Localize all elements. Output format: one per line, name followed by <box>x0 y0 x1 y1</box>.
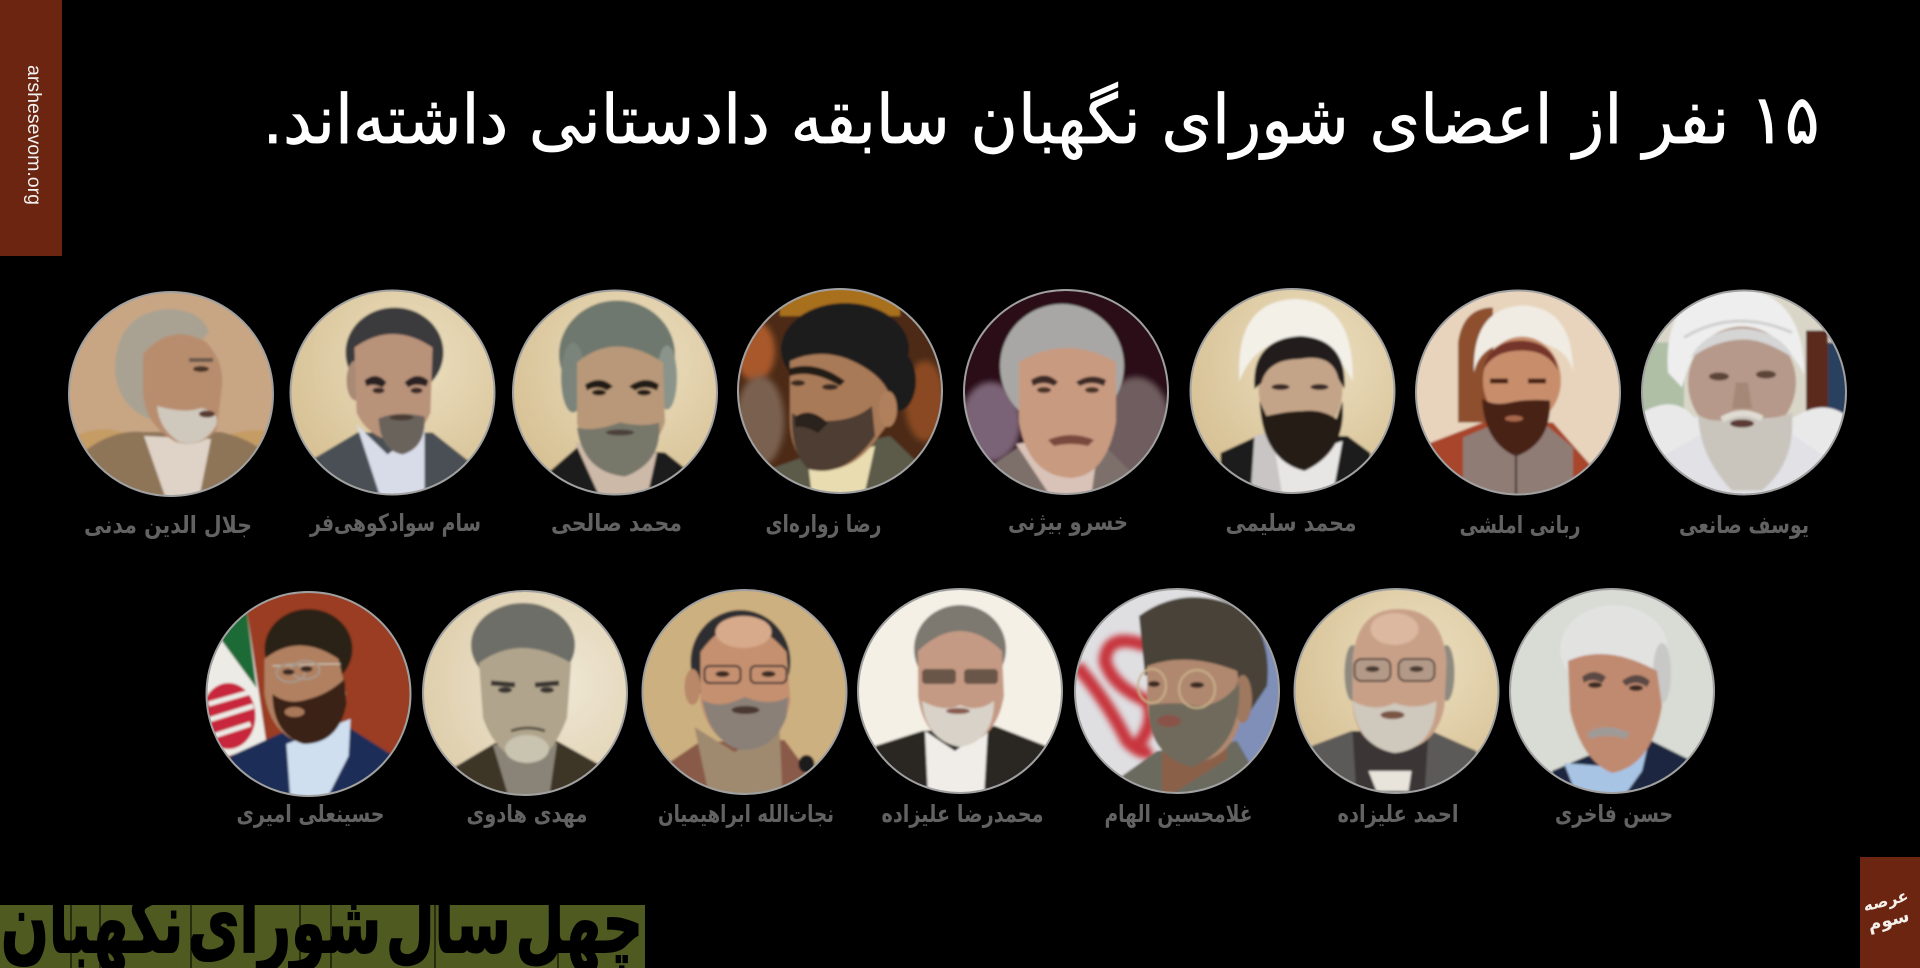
member: Yusef Sanei <box>1639 288 1849 539</box>
portrait <box>510 288 720 498</box>
portrait <box>420 588 630 798</box>
portrait <box>1292 586 1502 796</box>
member: Mohammadreza Alizadeh <box>855 586 1065 828</box>
member: Nejatollah Ebrahimian <box>640 587 850 828</box>
portrait <box>735 286 945 496</box>
side tab: website <box>0 0 62 256</box>
portrait <box>1413 288 1623 498</box>
banner: forty years of the Guardian Council <box>0 905 645 968</box>
name: سام سوادکوهی‌فر <box>309 509 481 537</box>
portrait <box>202 589 414 799</box>
member: Jalaleddin Madani <box>66 289 276 539</box>
name: محمد سلیمی <box>1226 509 1356 537</box>
member: Mehdi Hadavi <box>420 588 630 828</box>
name: خسرو بیژنی <box>1008 508 1128 536</box>
name: محمدرضا علیزاده <box>882 800 1044 828</box>
member: Gholamhossein Elham <box>1072 586 1282 828</box>
name: نجات‌الله ابراهیمیان <box>658 800 834 828</box>
member: Mohammad Salehi <box>510 288 720 537</box>
portrait <box>855 586 1065 796</box>
name: یوسف صانعی <box>1679 511 1809 539</box>
name: حسن فاخری <box>1555 800 1673 828</box>
banner text <box>4 905 638 968</box>
name: ربانی املشی <box>1460 511 1580 539</box>
title: ۱۵ نفر از اعضای شورای نگهبان سابقه دادستانی داشته‌اند. <box>262 81 1819 160</box>
portrait <box>961 287 1171 497</box>
logo calligraphy <box>1861 886 1915 936</box>
member: Rabbani Amlashi <box>1413 288 1623 539</box>
logo calligraphy: عرصه <box>1861 886 1910 915</box>
name: غلامحسین الهام <box>1104 800 1252 828</box>
portrait <box>66 289 276 499</box>
member: Khosrow Bizhani <box>961 287 1171 536</box>
member: Reza Zavarei <box>735 286 945 538</box>
portrait <box>640 587 850 797</box>
name: احمد علیزاده <box>1338 800 1458 828</box>
website address: arshesevom.org <box>23 65 44 205</box>
portrait <box>288 288 498 498</box>
portrait <box>1188 286 1398 496</box>
portrait <box>1072 586 1282 796</box>
member: Mohammad Salimi <box>1188 286 1398 537</box>
member: Hassan Fakhri <box>1507 586 1717 828</box>
name: محمد صالحی <box>551 509 682 537</box>
name: حسینعلی امیری <box>236 800 384 828</box>
name: جلال الدین مدنی <box>84 511 252 539</box>
logo calligraphy: سوم <box>1866 905 1912 936</box>
member: Hosseinali Amiri <box>202 589 414 828</box>
logo tab: Arseh Sevom <box>1860 857 1920 968</box>
portrait <box>1507 586 1717 796</box>
name: مهدی هادوی <box>466 800 588 828</box>
member: Sam Savadkouhifar <box>288 288 498 537</box>
portrait <box>1639 288 1849 498</box>
member: Ahmad Alizadeh <box>1292 586 1502 828</box>
name: رضا زواره‌ای <box>766 510 882 538</box>
